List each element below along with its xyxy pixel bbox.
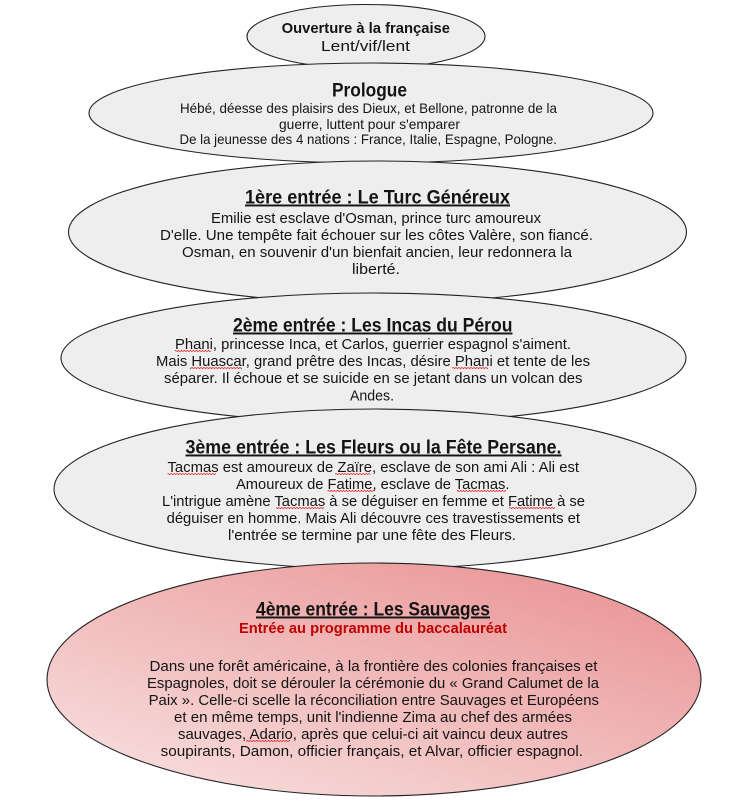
panel: quatrième entrée [47,563,701,796]
text: deuxième entrée summary: Mais Huascar, grand prêtre des Incas, désire Phani et tente de les [156,353,590,370]
text: deuxième entrée summary: Andes. [350,388,394,404]
panel: ouverture [247,4,485,68]
text: quatrième entrée summary: Paix ». Celle-ci scelle la réconciliation entre Sauvages et Européens [149,692,599,709]
text: troisième entrée summary: Tacmas est amoureux de Zaïre, esclave de son ami Ali : Ali est [168,459,580,476]
text: troisième entrée summary: Amoureux de Fatime, esclave de Tacmas. [236,476,510,493]
panel: première entrée [68,161,686,303]
text: troisième entrée summary: déguiser en homme. Mais Ali découvre ces travestissements et [167,510,581,527]
heading: deuxième entrée: 2ème entrée : Les Incas du Pérou [233,314,512,336]
text: troisième entrée summary: l'entrée se termine par une fête des Fleurs. [228,527,516,544]
text: première entrée summary: D'elle. Une tempête fait échouer sur les côtes Valère, son fiancé. [160,227,593,244]
callout: programme du baccalauréat: Entrée au programme du baccalauréat [239,620,507,637]
text: quatrième entrée summary: soupirants, Damon, officier français, et Alvar, officier espagnol. [161,743,583,760]
text: quatrième entrée summary [147,658,600,760]
text: prologue summary: Hébé, déesse des plaisirs des Dieux, et Bellone, patronne de la [180,100,557,116]
text: première entrée summary: liberté. [352,261,400,278]
text: prologue summary [180,100,557,147]
text: première entrée summary: Emilie est esclave d'Osman, prince turc amoureux [211,210,541,227]
text: première entrée summary [160,210,593,278]
text: prologue summary: De la jeunesse des 4 nations : France, Italie, Espagne, Pologne. [180,131,557,147]
heading: prologue: Prologue [332,80,407,102]
panel: troisième entrée [54,409,696,569]
heading: troisième entrée: 3ème entrée : Les Fleurs ou la Fête Persane. [186,436,562,458]
text: prologue summary: guerre, luttent pour s'emparer [279,116,460,132]
text: première entrée summary: Osman, en souvenir d'un bienfait ancien, leur redonnera la [182,244,573,261]
heading: première entrée: 1ère entrée : Le Turc Généreux [245,186,510,208]
heading: quatrième entrée: 4ème entrée : Les Sauvages [256,598,490,620]
text: quatrième entrée summary: et en même temps, unit l'indienne Zima au chef des armées [174,709,572,726]
panel: prologue [89,63,653,163]
heading: ouverture: Ouverture à la française [282,20,450,37]
text: quatrième entrée summary: sauvages, Adario, après que celui-ci ait vaincu deux autres [178,726,568,743]
text: troisième entrée summary [162,459,585,544]
text: deuxième entrée summary: séparer. Il échoue et se suicide en se jetant dans un volcan des [164,370,582,387]
text: deuxième entrée summary [156,336,590,404]
text: quatrième entrée summary: Dans une forêt américaine, à la frontière des colonies françaises et [150,658,598,675]
text: quatrième entrée summary: Espagnoles, doit se dérouler la cérémonie du « Grand Calumet de la [147,675,600,692]
text: troisième entrée summary: L'intrigue amène Tacmas à se déguiser en femme et Fatime à se [162,493,585,510]
text: tempo: Lent/vif/lent [321,38,411,55]
panel: deuxième entrée [61,293,686,423]
text: deuxième entrée summary: Phani, princesse Inca, et Carlos, guerrier espagnol s'aiment. [175,336,571,353]
